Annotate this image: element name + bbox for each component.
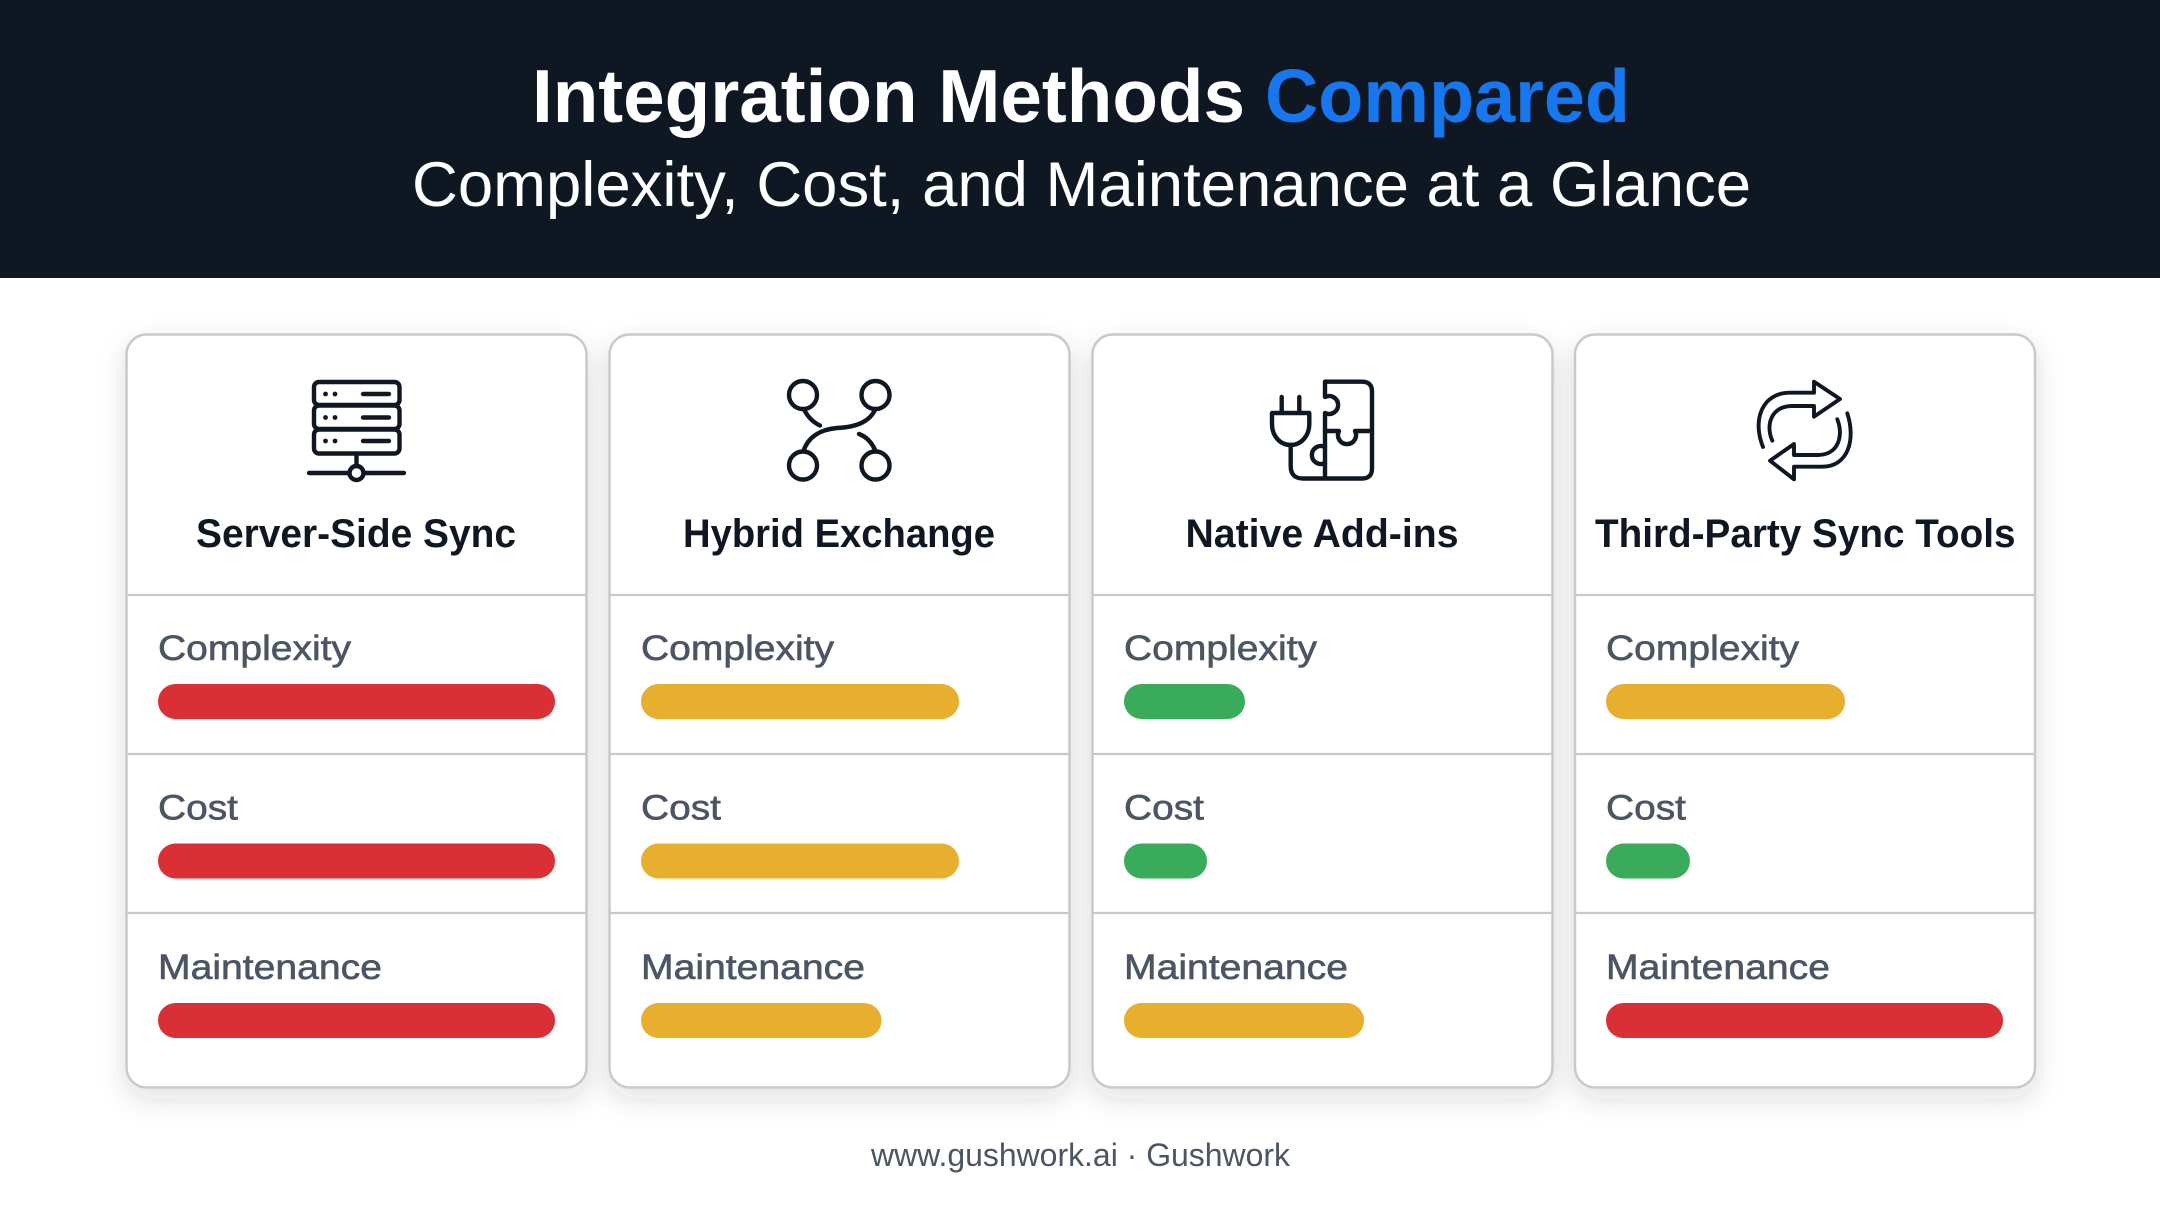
metric: Maintenance: Maintenance <box>1124 948 1348 987</box>
metric: Complexity <box>1124 629 1318 719</box>
metric: Maintenance <box>158 948 555 1038</box>
footer: www.gushwork.ai · Gushwork <box>870 1137 1291 1173</box>
metric: Cost <box>1606 788 1690 878</box>
panel: Third-Party Sync Tools <box>1575 334 2035 1088</box>
icon: sync arrows <box>1759 382 1851 479</box>
metric: Cost: Cost <box>641 788 721 828</box>
metric: Complexity: Complexity <box>641 629 835 668</box>
metric: Maintenance: Maintenance <box>158 948 382 987</box>
panel: Native Add-ins <box>1092 334 1552 1088</box>
panel: Server-Side Sync <box>126 334 586 1088</box>
title <box>532 54 1630 138</box>
metric: Cost: Cost <box>1124 788 1204 828</box>
subtitle: Complexity, Cost, and Maintenance at a Glance <box>412 150 1751 220</box>
heading: Hybrid Exchange: Hybrid Exchange <box>683 512 995 556</box>
metric: Maintenance <box>1606 948 2003 1038</box>
title: Compared <box>1265 54 1630 138</box>
metric: Maintenance <box>1124 948 1364 1038</box>
heading: Server-Side Sync: Server-Side Sync <box>196 512 516 556</box>
metric: Complexity <box>158 629 555 719</box>
icon: crossing nodes <box>789 381 890 480</box>
metric: Cost: Cost <box>158 788 238 828</box>
metric: Complexity <box>641 629 959 719</box>
metric: Cost <box>641 788 959 878</box>
metric: Cost <box>1124 788 1207 878</box>
metric: Complexity: Complexity <box>1606 629 1800 668</box>
header banner <box>0 0 2160 278</box>
metric: Maintenance: Maintenance <box>1606 948 1830 987</box>
heading: Third-Party Sync Tools: Third-Party Sync Tools <box>1595 512 2016 556</box>
icon: server rack <box>309 382 404 480</box>
metric: Cost <box>158 788 555 878</box>
panel: Hybrid Exchange <box>610 334 1070 1088</box>
metric: Maintenance <box>641 948 882 1038</box>
title: Integration Methods <box>532 54 1245 138</box>
metric: Complexity <box>1606 629 1845 719</box>
icon: plug and puzzle <box>1272 382 1372 478</box>
metric: Complexity: Complexity <box>1124 629 1318 668</box>
metric: Complexity: Complexity <box>158 629 352 668</box>
heading: Native Add-ins: Native Add-ins <box>1186 512 1458 556</box>
metric: Cost: Cost <box>1606 788 1686 828</box>
metric: Maintenance: Maintenance <box>641 948 865 987</box>
